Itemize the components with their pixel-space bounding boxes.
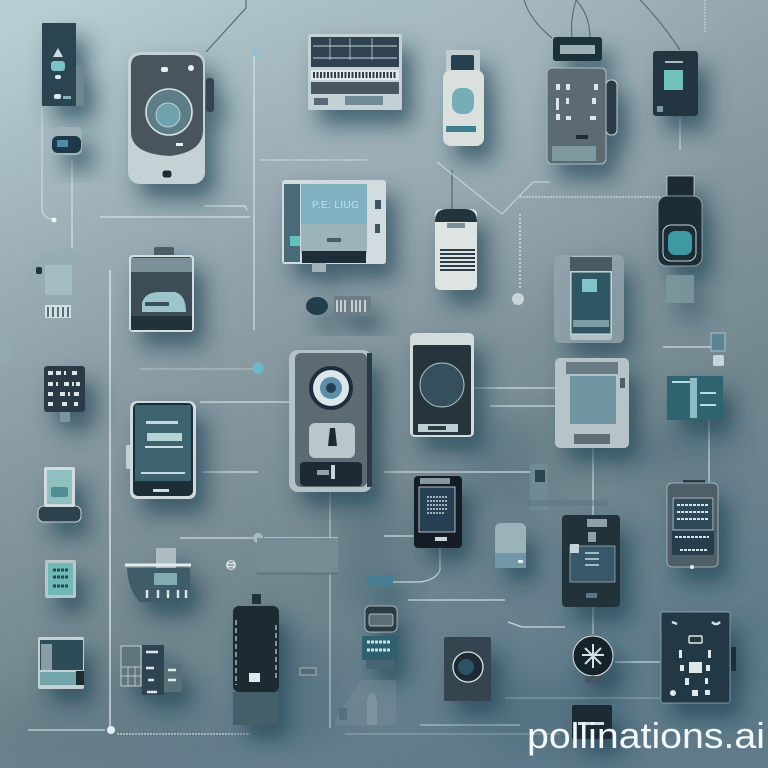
device: small teal tile [45, 560, 76, 598]
device: dark smartphone with circular graphic [410, 333, 474, 437]
device: large camera unit [289, 350, 372, 492]
device: printer terminal [282, 180, 386, 272]
device: small stand display [38, 467, 81, 522]
device: translucent cup sensor [495, 523, 526, 568]
device: tablet with teal screen in translucent case [554, 255, 624, 343]
device: large smartwatch phone [128, 52, 214, 184]
device: tiny chip [711, 333, 725, 366]
device: teal display block [667, 376, 723, 420]
device: translucent house module [25, 250, 95, 318]
device: black battery pack [233, 594, 279, 725]
device: small side unit [528, 464, 608, 510]
device: round emblem sensor [573, 636, 613, 683]
device: dark USB unit [658, 176, 702, 303]
device: dark phone with menu screen [562, 515, 620, 607]
device: grey scanner [555, 358, 629, 448]
device: large dark control panel [661, 612, 736, 703]
small fingerprint node [226, 560, 236, 570]
device: small dark screen at bottom [572, 705, 612, 739]
device: faint bottom silhouettes [335, 680, 396, 725]
device: dark tablet with teal screen [653, 51, 698, 116]
panel: translucent grey box [257, 538, 338, 575]
device: keyboard console [308, 34, 402, 110]
device: small connector module [52, 127, 82, 155]
device: black round-lens box [444, 637, 491, 701]
screen label: P.E: LIUG [312, 200, 359, 211]
device: dark phone with teal screen [126, 401, 196, 499]
watermark: pollinations.ai [527, 715, 765, 756]
device: circuit board [121, 645, 182, 695]
device: small lock terminal [362, 576, 398, 669]
device: e-reader [667, 480, 718, 569]
device: dark keypad tile [44, 366, 85, 422]
device: slim dark remote [42, 23, 84, 106]
device: black pager [414, 476, 462, 548]
device: oval sensor and tag [306, 296, 371, 316]
device: open circuit dock [125, 548, 191, 602]
connector nodes [52, 49, 524, 734]
device: cream handset [443, 50, 484, 146]
device: white radio [435, 209, 477, 290]
device: grey handheld with handle [547, 37, 617, 164]
device: dark square handheld [129, 247, 194, 332]
device: dark panel with bar [38, 637, 84, 689]
small tag [300, 668, 316, 675]
